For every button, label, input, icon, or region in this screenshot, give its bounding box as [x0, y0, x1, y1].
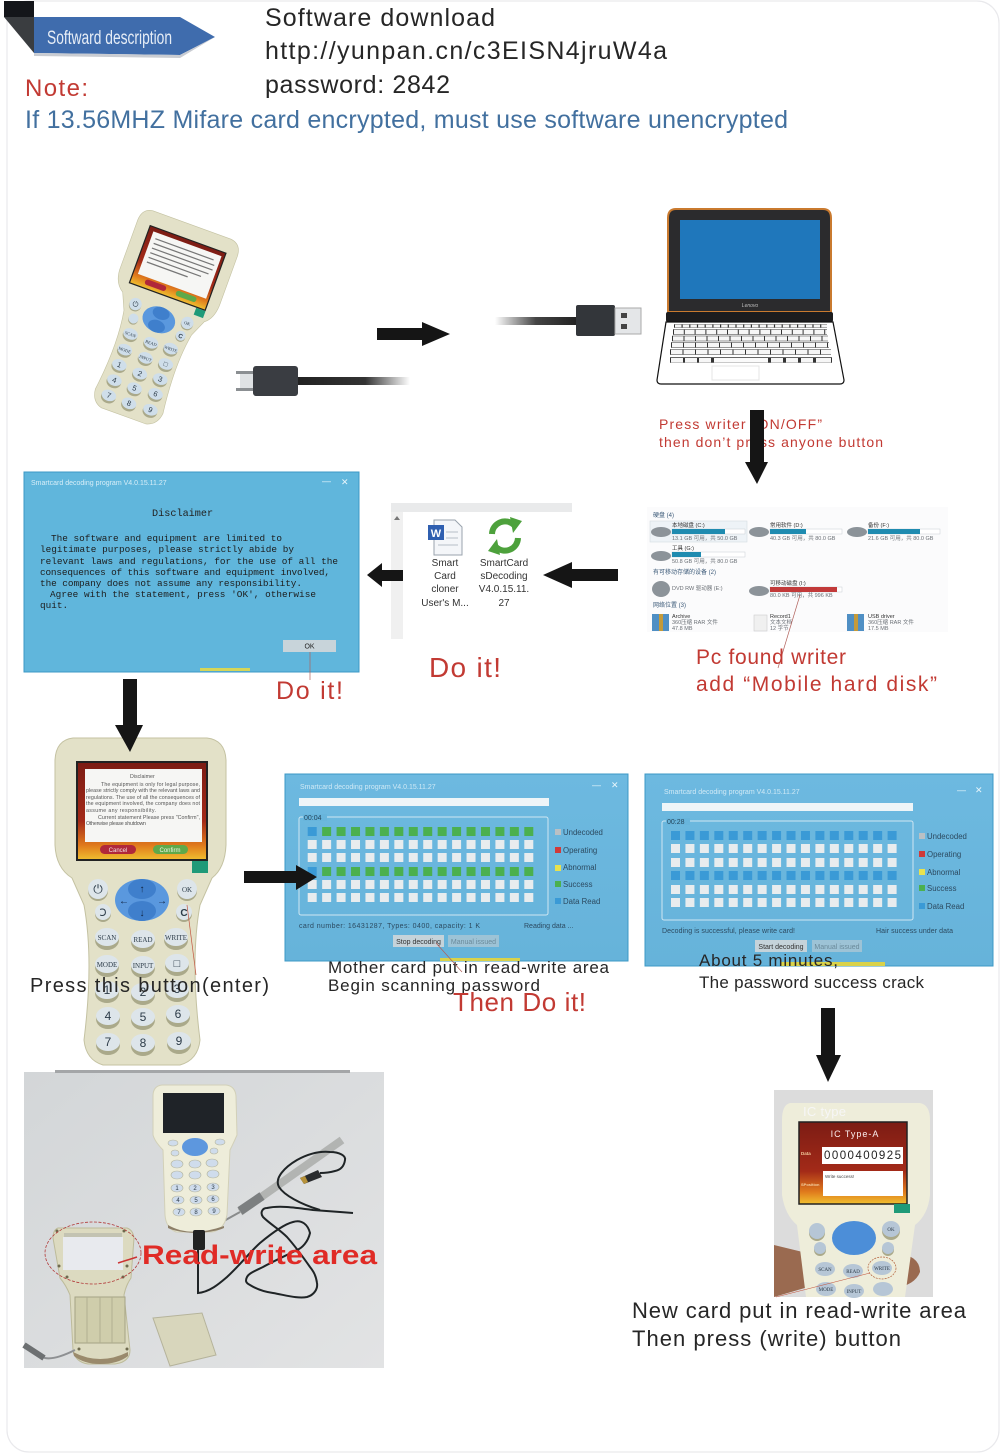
mother card text: Mother card put in read-write area	[328, 958, 610, 977]
folder panel: sDecoding	[480, 571, 528, 582]
note text: If 13.56MHZ Mifare card encrypted, must use software unencrypted	[25, 106, 788, 134]
device: tilted card cloner: 7	[105, 390, 112, 400]
leader line: OK	[309, 652, 311, 680]
keypad: WRITE	[165, 934, 187, 942]
decoding window: success: Decoding is successful, please write card!	[662, 928, 795, 935]
screen buttons: Cancel	[109, 848, 127, 854]
device: tilted card cloner: 8	[126, 398, 133, 408]
device: tilted card cloner: □	[162, 361, 169, 369]
pc found writer text	[696, 646, 937, 696]
about 5 minutes text: About 5 minutes,	[699, 951, 838, 970]
decoding window: scanning: 00:04	[304, 815, 322, 822]
device photo: IC type: SPosition	[801, 1182, 820, 1187]
banner: Softward description	[4, 1, 215, 58]
drives panel: 50.8 GB 可用，共 80.0 GB	[672, 557, 738, 565]
device: tilted card cloner: 6	[152, 389, 159, 399]
legend: Data Read	[563, 897, 600, 906]
screen buttons	[100, 845, 188, 854]
new card text: Then press (write) button	[632, 1326, 901, 1351]
drives panel: 有可移动存储的设备 (2)	[653, 568, 716, 576]
disclaimer window: ✕	[341, 477, 349, 487]
device: large card cloner	[55, 738, 226, 1065]
device: tilted card cloner: 5	[131, 383, 138, 393]
battery cover	[153, 1313, 216, 1366]
keypad: ←	[119, 896, 129, 907]
keypad: MODE	[819, 1288, 833, 1293]
drives panel: 文本文档	[770, 618, 793, 626]
disclaimer window	[24, 472, 359, 672]
software download text: password: 2842	[265, 71, 450, 99]
drives panel: 360压缩 RAR 文件	[672, 618, 718, 626]
keypad: 7	[105, 1035, 112, 1049]
decoding window: scanning: Smartcard decoding program V4.0.15.11.27	[300, 784, 436, 791]
drives panel: 备份 (F:)	[868, 521, 889, 529]
legend	[555, 828, 603, 906]
keypad	[776, 1221, 900, 1298]
disclaimer window: quit.	[40, 600, 68, 611]
mother card text	[328, 958, 610, 995]
device: tilted card cloner: 3	[157, 374, 164, 384]
device: tilted card cloner: 4	[111, 375, 118, 385]
disclaimer window: consequences of this software and equipment involved,	[40, 567, 330, 578]
keypad: ⏻	[93, 882, 103, 896]
keypad: INPUT	[133, 962, 154, 970]
screen buttons: Confirm	[159, 848, 181, 854]
pc found writer text: add “Mobile hard disk”	[696, 673, 937, 696]
press writer instruction	[659, 416, 883, 450]
disclaimer window: Disclaimer	[152, 508, 213, 520]
legend: Abnormal	[927, 868, 961, 877]
decoding window: scanning	[285, 774, 628, 961]
arrow: down to drives	[745, 410, 768, 484]
about 5 minutes text	[699, 951, 924, 992]
drives panel: 17.5 MB	[868, 626, 889, 632]
folder panel: SmartCard	[480, 558, 528, 569]
decoding window: success: Manual issued	[814, 944, 860, 951]
drives panel: 21.6 GB 可用，共 80.0 GB	[868, 534, 934, 542]
screen: disclaimer text: the equipment involved, the company does not	[86, 801, 201, 807]
press writer instruction: Press writer “ON/OFF”	[659, 416, 822, 432]
arrow: right into window	[244, 865, 317, 890]
device: tilted card cloner: WRITE	[163, 344, 178, 354]
decoding window: scanning: ✕	[611, 780, 619, 790]
legend	[919, 832, 967, 911]
drives panel: 常用软件 (D:)	[770, 521, 803, 529]
Do it label: Do it!	[429, 652, 501, 683]
arrow: left from folder	[367, 563, 403, 587]
keypad: 2	[140, 985, 147, 999]
device photo: IC type: IC Type-A	[831, 1129, 879, 1139]
disclaimer window: —	[322, 476, 331, 486]
keypad: C	[180, 908, 188, 919]
then do it label: Then Do it!	[453, 987, 586, 1017]
disclaimer window: Smartcard decoding program V4.0.15.11.27	[31, 480, 167, 487]
arrow: down to new card	[816, 1008, 841, 1082]
decoding window: scanning: —	[592, 780, 601, 790]
keypad: 8	[140, 1036, 147, 1050]
keypad: SCAN	[98, 934, 116, 942]
drives panel: 可移动磁盘 (I:)	[770, 579, 806, 587]
drives panel: Record1	[770, 614, 791, 620]
read-write area label: Read-write area	[142, 1240, 378, 1270]
device: front view	[153, 1085, 237, 1250]
screen: disclaimer text: Otherwise please shutdown	[86, 821, 146, 827]
folder panel: cloner	[431, 584, 459, 595]
software download text: Software download	[265, 4, 495, 32]
device: tilted card cloner: MODE	[118, 345, 132, 355]
keypad: ↓	[140, 908, 144, 919]
device photo: IC type: Write success!	[825, 1174, 854, 1179]
keypad: 4	[105, 1009, 112, 1023]
decoding window: success: 00:28	[667, 819, 685, 826]
device: front view: 8	[194, 1210, 198, 1216]
drives panel: 硬盘 (4)	[653, 511, 674, 519]
dashed circle	[45, 1222, 141, 1284]
pc found writer text: Pc found writer	[696, 646, 846, 669]
device: tilted card cloner: 1	[116, 360, 123, 370]
keypad: 6	[175, 1007, 182, 1021]
keypad: 9	[176, 1034, 183, 1048]
software download text	[265, 4, 667, 99]
drives panel: 80.0 KB 可用，共 996 KB	[770, 591, 833, 599]
device: front view: 9	[212, 1209, 216, 1215]
disclaimer window: the company does not assume any responsibility.	[40, 578, 302, 589]
device: front view: 4	[176, 1198, 180, 1204]
drives panel: 47.8 MB	[672, 626, 693, 632]
keypad: MODE	[97, 961, 117, 969]
drives panel: 40.3 GB 可用，共 80.0 GB	[770, 534, 836, 542]
mother card text: Begin scanning password	[328, 976, 540, 995]
laptop: Lenovo	[742, 303, 758, 309]
strap	[222, 1140, 342, 1222]
decoding window: success: Smartcard decoding program V4.0.15.11.27	[664, 789, 800, 796]
drives panel: 360压缩 RAR 文件	[868, 618, 914, 626]
decoding window: scanning: Stop decoding	[396, 939, 441, 946]
cable: micro USB	[236, 366, 410, 396]
keypad: OK	[887, 1228, 895, 1233]
progress grid	[308, 827, 533, 898]
banner: Softward description: Softward description	[47, 28, 172, 49]
screen: disclaimer text: assume any responsibility.	[86, 808, 156, 814]
device: tilted card cloner: READ	[145, 339, 157, 347]
keypad: □	[174, 958, 181, 970]
keypad: INPUT	[847, 1290, 861, 1295]
drives panel: 13.1 GB 可用，共 50.0 GB	[672, 534, 738, 542]
keypad	[88, 879, 197, 1056]
folder panel: V4.0.15.11.	[479, 584, 529, 595]
icon: word document: W	[431, 528, 442, 540]
laptop	[657, 209, 844, 384]
decoding window: success: Hair success under data	[876, 928, 953, 935]
leader line: mobile disk	[778, 595, 800, 668]
keypad: READ	[133, 936, 153, 944]
device: front view: 2	[193, 1186, 197, 1192]
keypad: ↑	[140, 884, 144, 895]
device: tilted card cloner: OK	[183, 320, 192, 327]
drives panel: Archive	[672, 614, 690, 620]
keypad: SCAN	[818, 1268, 832, 1273]
drives panel: 本地磁盘 (C:)	[672, 521, 705, 529]
folder panel	[391, 503, 572, 639]
new card text: New card put in read-write area	[632, 1298, 967, 1323]
screen: disclaimer text: regulations. The use of all the consequences of	[86, 795, 201, 801]
keypad: 3	[174, 982, 181, 996]
device photo: IC type: 0000400925	[824, 1150, 901, 1162]
decoding window: success: ✕	[975, 785, 983, 795]
keypad: 1	[104, 983, 111, 997]
screen: disclaimer text: The equipment is only for legal purpose,	[101, 782, 200, 788]
decoding window: scanning: card number: 16431287, Types: 0400, capacity: 1 K	[299, 923, 480, 930]
about 5 minutes text: The password success crack	[699, 973, 924, 992]
device: tilted card cloner: INPUT	[139, 354, 153, 363]
arrow: left from drives	[543, 562, 618, 588]
device: front view: 3	[211, 1185, 215, 1191]
progress grid	[671, 836, 897, 902]
legend: Undecoded	[563, 828, 603, 837]
legend: Data Read	[927, 902, 964, 911]
device: tilted card cloner: 2	[136, 369, 143, 379]
legend: Operating	[563, 846, 597, 855]
disclaimer window: relevant laws and regulations, for the use of all the	[40, 556, 338, 567]
decoding window: success: —	[957, 785, 966, 795]
folder panel: Card	[434, 571, 456, 582]
disclaimer window: The software and equipment are limited to	[51, 533, 282, 544]
device photo: IC type	[774, 1090, 933, 1298]
press this button text: Press this button(enter)	[30, 975, 269, 997]
cable: USB plug	[495, 305, 641, 336]
folder panel: User's M...	[421, 598, 469, 609]
press writer instruction: then don’t press anyone button	[659, 434, 883, 450]
device photo: IC type: IC type	[803, 1104, 846, 1119]
keypad: Ↄ	[99, 908, 107, 919]
drives panel: DVD RW 驱动器 (E:)	[672, 585, 723, 592]
disclaimer window: OK	[304, 644, 315, 650]
photo: read-write area	[24, 1070, 384, 1368]
disclaimer window: Agree with the statement, press 'OK', otherwise	[50, 589, 316, 600]
device: tilted card cloner: C	[177, 333, 184, 341]
decoding window: success: Start decoding	[758, 944, 804, 951]
drives panel: 网络位置 (3)	[653, 601, 686, 609]
keypad: 5	[140, 1010, 147, 1024]
device: front view: 7	[177, 1210, 181, 1216]
new card text	[632, 1298, 967, 1351]
folder panel: Smart	[432, 558, 459, 569]
leader line: stop decoding	[436, 943, 462, 972]
device: front view: 6	[211, 1197, 215, 1203]
folder panel: 27	[498, 598, 510, 609]
device: front view: 5	[194, 1198, 198, 1204]
note heading: Note:	[25, 75, 88, 102]
decoding window: scanning: Reading data ...	[524, 923, 573, 930]
device: back view	[24, 1228, 134, 1364]
legend: Operating	[927, 850, 961, 859]
legend: Success	[927, 884, 957, 893]
device: tilted card cloner	[73, 207, 242, 434]
decoding window: scanning: Manual issued	[451, 939, 496, 946]
device: tilted card cloner: ⏻	[131, 299, 140, 309]
keypad: READ	[846, 1270, 860, 1275]
drives panel: 工具 (G:)	[672, 545, 694, 552]
legend: Success	[563, 880, 593, 889]
icon: green refresh	[488, 517, 522, 555]
drives panel: USB driver	[868, 614, 895, 620]
drives panel: 12 字节	[770, 624, 789, 632]
keypad: OK	[182, 886, 192, 894]
drives panel	[647, 507, 948, 632]
Do it label: disclaimer: Do it!	[276, 677, 343, 705]
cable	[198, 1152, 353, 1298]
device photo: IC type: Data	[801, 1151, 811, 1156]
keypad: WRITE	[874, 1267, 890, 1272]
screen: disclaimer text: Current statement Please press "Confirm",	[98, 815, 200, 821]
device: tilted card cloner: 9	[147, 405, 154, 415]
software download text: http://yunpan.cn/c3EISN4jruW4a	[265, 37, 667, 65]
device: front view: 1	[175, 1186, 179, 1192]
hand	[774, 1245, 920, 1297]
legend: Undecoded	[927, 832, 967, 841]
arrow: right to USB	[377, 322, 450, 346]
screen: disclaimer text: Disclaimer	[130, 774, 155, 780]
icon: word document	[428, 520, 462, 555]
keypad: →	[157, 896, 167, 907]
disclaimer window: legitimate purposes, please strictly abide by	[40, 544, 294, 555]
arrow: down to device	[115, 679, 143, 752]
leader line: OK button	[187, 905, 196, 975]
screen: disclaimer text	[85, 769, 202, 842]
device: tilted card cloner: SCAN	[124, 330, 138, 339]
decoding window: success	[645, 774, 993, 966]
screen: disclaimer text: please strictly comply with the relevant laws and	[86, 788, 200, 794]
legend: Abnormal	[563, 863, 597, 872]
